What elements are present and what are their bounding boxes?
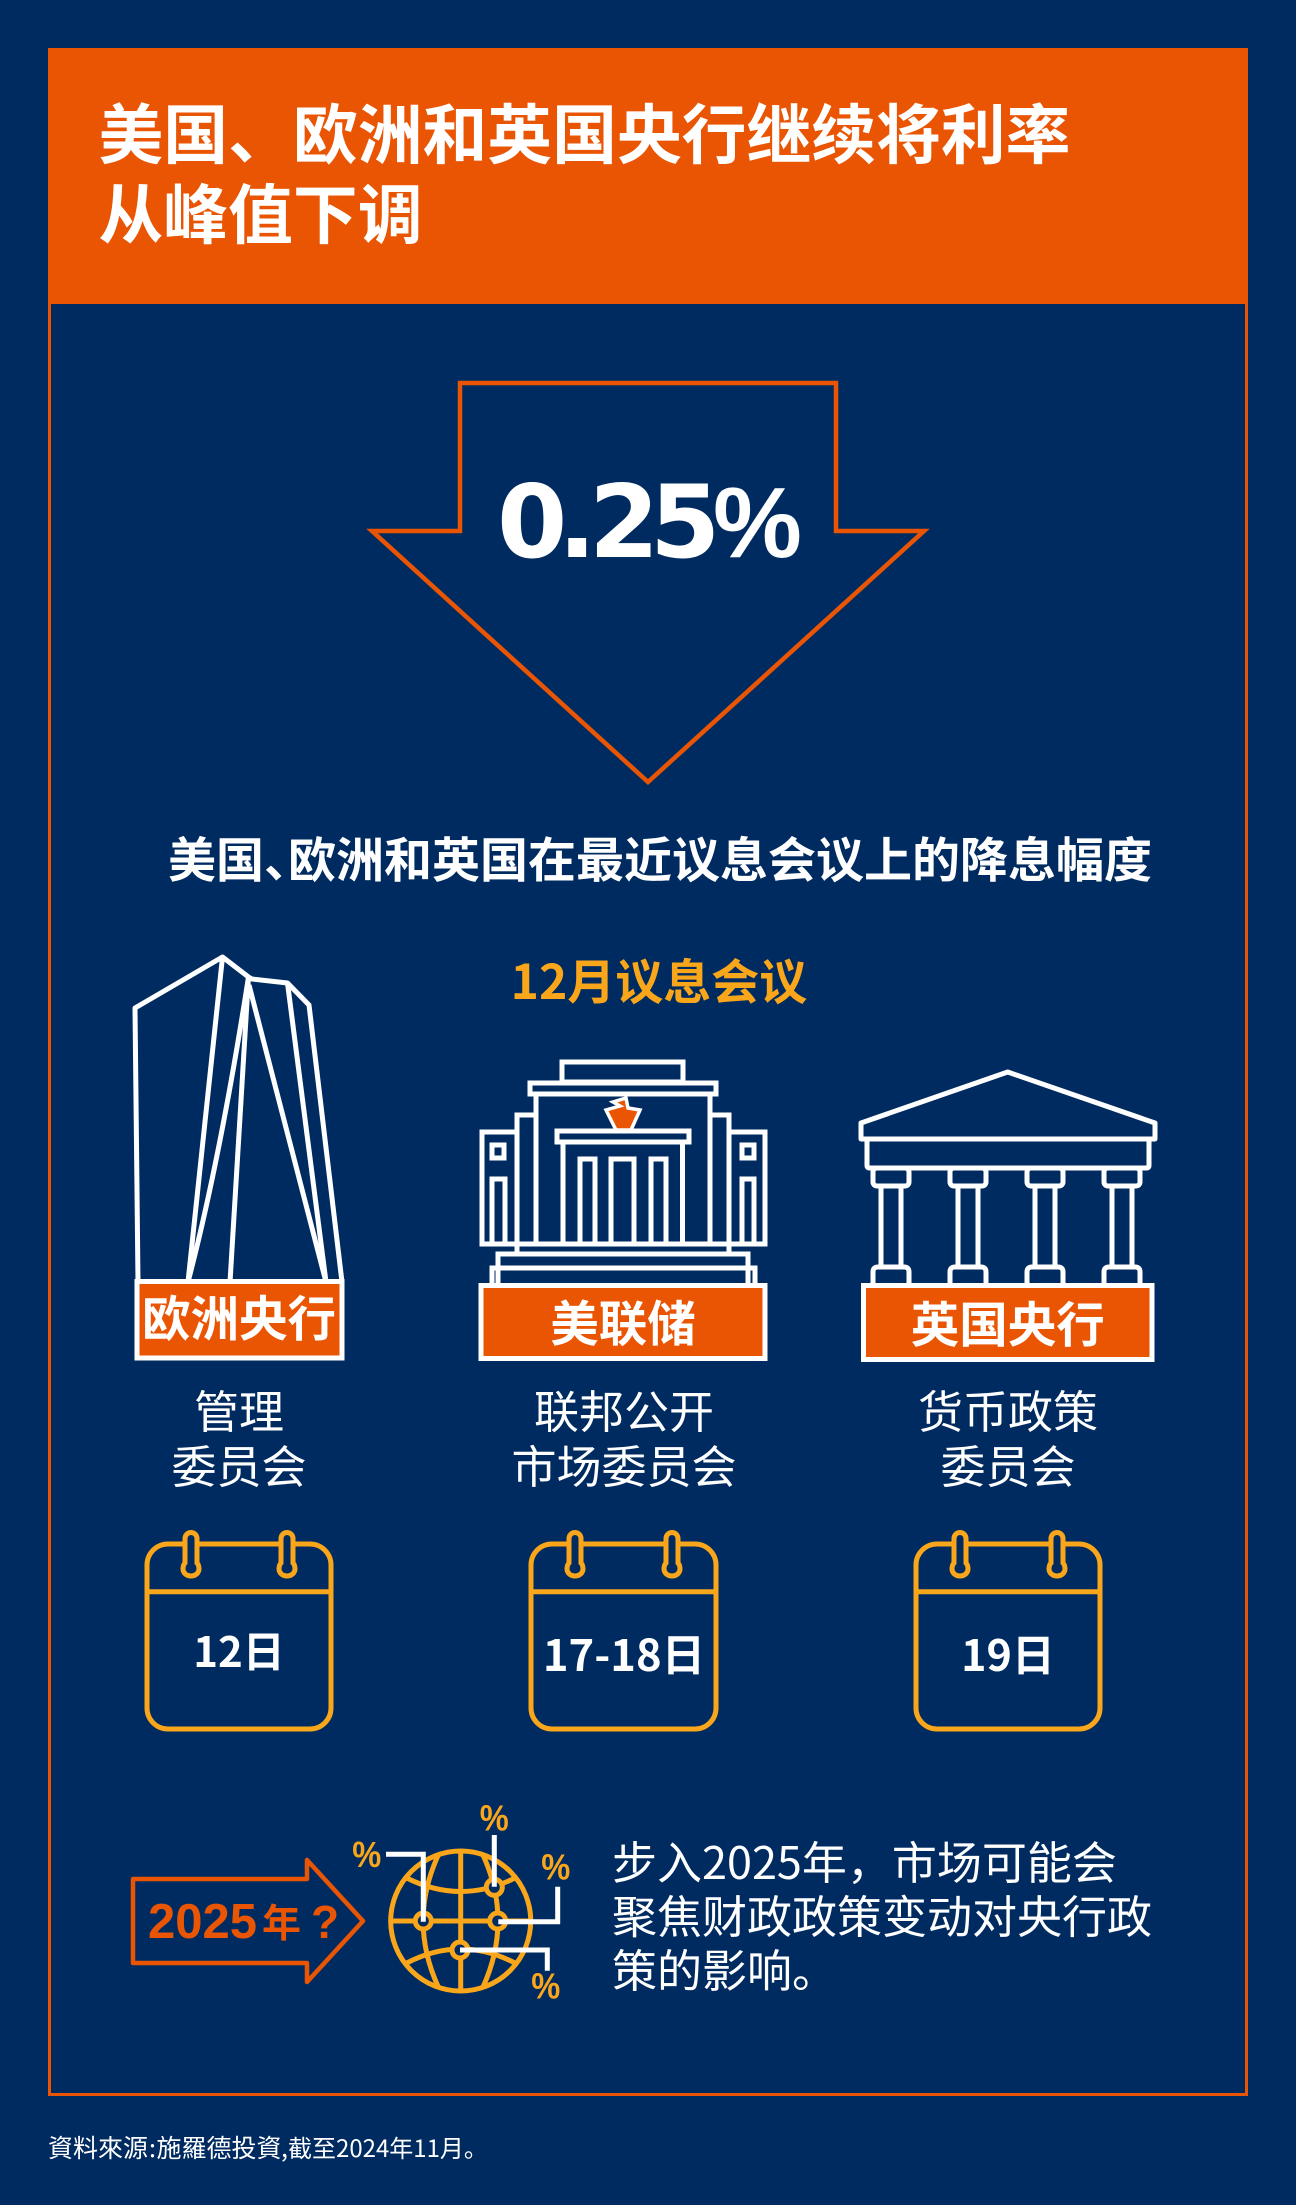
icon: calendar BoE date: 19日 [961, 1622, 1055, 1684]
big down arrow with rate cut [372, 383, 924, 782]
title banner [48, 48, 1248, 304]
text: ECB committee [171, 1376, 307, 1496]
subtitle: 美国、 [168, 821, 312, 891]
text block: outlook 2025 [612, 1827, 1152, 2000]
icon: calendar Fed date [531, 1533, 716, 1729]
source note [48, 2129, 488, 2165]
icon: globe with percent nodes [352, 1798, 570, 2006]
text block: outlook 2025: 策的影响。 [612, 1935, 837, 2000]
source note: 截至2024年11月。 [288, 2129, 488, 2164]
source note: 施羅德投資 [156, 2129, 282, 2165]
icon: globe with percent nodes: % [541, 1846, 570, 1888]
icon: Federal Reserve building [482, 1062, 765, 1285]
text: Fed committee [511, 1376, 737, 1496]
icon: Bank of England building [861, 1072, 1155, 1285]
label: Bank of England: 英国央行 [911, 1286, 1105, 1356]
arrow: 2025 question: ? [311, 1896, 339, 1948]
icon: globe with percent nodes: % [480, 1798, 509, 1838]
label: Federal Reserve [481, 1285, 765, 1358]
text: BoE committee [918, 1376, 1098, 1496]
source note: : [149, 2129, 156, 2165]
text block: outlook 2025: 聚焦财政政策变动对央行政 [612, 1881, 1152, 1946]
arrow: 2025 question: 2025 [148, 1895, 257, 1949]
icon: globe with percent nodes: % [352, 1834, 381, 1875]
text: Fed committee: 联邦公开 [534, 1376, 714, 1441]
heading: December meetings: 12月议息会议 [511, 943, 807, 1013]
icon: calendar ECB date: 12日 [193, 1619, 285, 1680]
icon: ECB building [135, 957, 342, 1282]
title banner: 从峰值下调 [98, 163, 422, 257]
subtitle: 欧洲和英国在最近议息会议上的降息幅度 [288, 821, 1152, 891]
icon: calendar ECB date [147, 1533, 331, 1729]
big down arrow with rate cut: 0.25 [497, 463, 720, 581]
icon: globe with percent nodes: % [531, 1966, 560, 2006]
text block: outlook 2025: 步入2025年，市场可能会 [612, 1827, 1117, 1892]
label: Bank of England [864, 1286, 1152, 1360]
source note: 資料來源 [48, 2129, 148, 2165]
arrow: 2025 question [133, 1860, 363, 1982]
label: ECB: 欧洲央行 [142, 1280, 336, 1350]
text: ECB committee: 管理 [194, 1376, 284, 1441]
icon: calendar BoE date [916, 1533, 1100, 1729]
source note: , [281, 2129, 288, 2165]
title banner: 美国、欧洲和英国央行继续将利率 [98, 83, 1070, 177]
arrow: 2025 question: 年 [262, 1893, 301, 1949]
text: BoE committee: 货币政策 [918, 1376, 1098, 1441]
label: Federal Reserve: 美联储 [550, 1285, 696, 1355]
text: ECB committee: 委员会 [171, 1431, 307, 1496]
text: Fed committee: 市场委员会 [511, 1431, 737, 1496]
icon: calendar Fed date: 17-18日 [543, 1621, 705, 1684]
text: BoE committee: 委员会 [940, 1431, 1076, 1496]
big down arrow with rate cut: % [713, 467, 802, 579]
